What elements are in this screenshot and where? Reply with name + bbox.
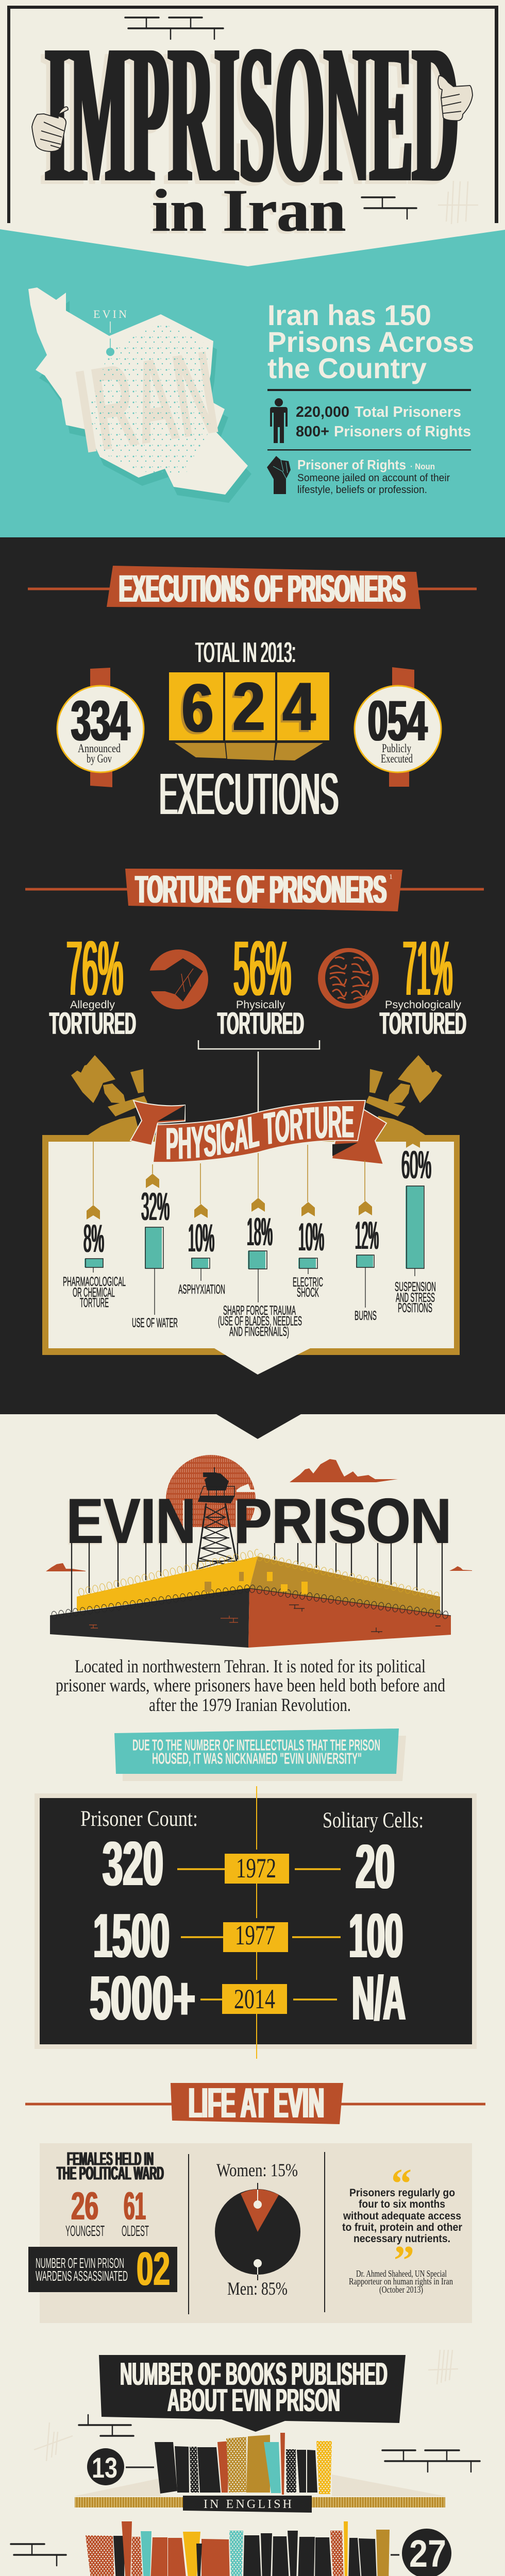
quote: Rapporteur on human rights in Iran xyxy=(349,2276,453,2286)
illustration: evin prison xyxy=(46,1455,472,1648)
small white cloud on sun xyxy=(237,1484,258,1492)
bar: asphyxiation 10% xyxy=(178,1216,225,1297)
arrow markers and hanging lines xyxy=(87,1133,420,1219)
bar: pharmacological torture 8%: TORTURE xyxy=(80,1296,109,1310)
count: 13: 13 xyxy=(92,2451,117,2484)
bar: suspension 60% xyxy=(395,1143,436,1315)
definition: Prisoner of Rights xyxy=(297,457,406,472)
label: in english xyxy=(183,2496,312,2513)
heading: books: ABOUT EVIN PRISON xyxy=(167,2383,340,2418)
panel: life at evin stats: OLDEST xyxy=(122,2223,149,2240)
text: women percentage: Women: 15% xyxy=(216,2160,298,2180)
stat: allegedly tortured: Allegedly xyxy=(70,999,115,1011)
definition: lifestyle, beliefs or profession. xyxy=(297,484,427,496)
text: 32% xyxy=(141,1185,170,1229)
column heading: solitary cells: Solitary Cells: xyxy=(323,1808,424,1833)
row 1972: 1972 xyxy=(236,1853,276,1884)
cloud: small left xyxy=(46,1563,86,1571)
oldest age: 61 xyxy=(124,2184,146,2228)
counter: 624 xyxy=(169,669,329,760)
ribbon: physical torture: PHYSICAL TORTURE xyxy=(166,1106,354,1159)
bracket connector xyxy=(198,1040,319,1113)
watch tower xyxy=(197,1467,237,1569)
text: ELECTRIC xyxy=(293,1275,323,1290)
column heading: prisoner count: Prisoner Count: xyxy=(80,1807,198,1831)
definition: · Noun xyxy=(410,462,435,471)
callout: evin university xyxy=(114,1728,406,1781)
panel: life at evin stats xyxy=(28,2143,472,2323)
map watermark text: IRAN xyxy=(68,326,226,478)
row 1977: 1977 xyxy=(235,1920,275,1951)
badge: publicly executed: Executed xyxy=(381,752,413,765)
text: USE OF WATER xyxy=(132,1316,178,1330)
icon: tally mark xyxy=(438,181,478,224)
youngest age xyxy=(65,2184,105,2240)
icon: brick marks top xyxy=(125,18,223,39)
badge: publicly executed: Publicly xyxy=(382,742,411,755)
badge: announced by government xyxy=(57,668,144,787)
text: 10% xyxy=(188,1216,214,1260)
quote: (October 2013) xyxy=(379,2284,423,2295)
text: (USE OF BLADES, NEEDLES xyxy=(218,1314,302,1328)
text: men percentage: Men: 85% xyxy=(227,2278,288,2299)
panel: physical torture xyxy=(42,1135,460,1375)
count: 13 xyxy=(87,2448,154,2485)
icon: left hand xyxy=(32,107,68,151)
pie chart xyxy=(215,2183,300,2280)
badge: announced by government: by Gov xyxy=(87,752,112,765)
quote: Prisoners regularly go xyxy=(349,2187,455,2199)
bar: use of water 32% xyxy=(132,1185,178,1330)
badge: announced by government: 334 xyxy=(71,689,130,753)
bar: sharp force trauma 18% xyxy=(218,1210,302,1339)
stat: psychologically tortured xyxy=(380,925,466,1041)
cloud: large xyxy=(290,1459,398,1482)
label: in english: IN ENGLISH xyxy=(204,2498,292,2511)
wardens box: NUMBER OF EVIN PRISON xyxy=(36,2255,124,2271)
stat: allegedly tortured: TORTURED xyxy=(49,1006,136,1041)
prisoner stats: Total Prisoners xyxy=(355,404,461,420)
quote xyxy=(342,2161,462,2295)
icon: crossed arrow right xyxy=(366,1055,442,1136)
quote: Dr. Ahmed Shaheed, UN Special xyxy=(356,2268,447,2279)
counter: 624: 4 xyxy=(283,669,315,745)
row 2014: 5000+ xyxy=(90,1963,195,2033)
heading: prison count: Iran has 150 xyxy=(267,299,431,331)
panel: timeline: N/A xyxy=(352,1963,406,2033)
bar: electric shock 10% xyxy=(293,1215,324,1300)
counter: 624: 2 xyxy=(233,669,265,745)
prisoner stats: 220,000 xyxy=(296,404,349,420)
icon: crossed arrow left xyxy=(71,1055,147,1136)
text: AND STRESS xyxy=(396,1291,435,1305)
icon: brick marks and tallies xyxy=(11,2350,480,2566)
sun xyxy=(166,1455,256,1527)
prisoner stats xyxy=(296,404,471,440)
shelf shade xyxy=(74,2475,445,2496)
badge: publicly executed xyxy=(355,667,441,787)
quote: “ xyxy=(391,2161,412,2207)
definition: Someone jailed on account of their xyxy=(297,472,450,484)
dark notch xyxy=(216,1414,301,1439)
heading: prison count xyxy=(267,299,474,384)
row 2014 xyxy=(90,1963,406,2033)
females heading xyxy=(57,2148,164,2183)
quote: ” xyxy=(394,2238,414,2283)
ribbon: physical torture xyxy=(130,1099,388,1164)
heading banner: life at evin: LIFE AT EVIN xyxy=(189,2079,324,2127)
row 1972 xyxy=(103,1828,395,1902)
sign poles xyxy=(72,1543,442,1615)
bar: pharmacological torture 8%: 8% xyxy=(83,1217,104,1261)
prisoner stats: 800+ xyxy=(296,423,329,440)
definition xyxy=(297,457,450,496)
icon: fist in circle xyxy=(147,950,208,1009)
badge: announced by government: Announced xyxy=(78,742,121,755)
razor wire xyxy=(50,1548,451,1620)
quote: without adequate access xyxy=(343,2210,461,2222)
text: 10% xyxy=(298,1215,324,1259)
bar: electric shock 10%: SHOCK xyxy=(297,1285,319,1300)
row 1972: 20 xyxy=(356,1832,395,1902)
bar: burns 12% xyxy=(355,1214,379,1323)
bar: pharmacological torture 8%: OR CHEMICAL xyxy=(73,1285,115,1300)
heading: books xyxy=(99,2355,406,2432)
icon: brick mark xyxy=(362,197,416,219)
stat: physically tortured xyxy=(217,925,304,1041)
quote: necessary nutrients. xyxy=(354,2233,450,2245)
map of Iran xyxy=(28,287,251,503)
females heading: THE POLITICAL WARD xyxy=(57,2163,164,2183)
building walls xyxy=(77,1556,258,1611)
heading: prison count: the Country xyxy=(267,352,427,384)
text: 12% xyxy=(355,1214,379,1258)
bookshelf: persian xyxy=(71,2521,451,2576)
stat: physically tortured: Physically xyxy=(236,999,285,1011)
text block: evin description: Located in northwestern Tehran. It is noted for its political xyxy=(75,1656,426,1676)
bar: pharmacological torture 8% xyxy=(63,1217,126,1310)
panel: header frame xyxy=(7,6,498,223)
count: 27: 27 xyxy=(409,2532,446,2575)
counter: 624: 6 xyxy=(182,670,213,747)
icon: person xyxy=(270,398,288,443)
text: TOTAL IN 2013: xyxy=(195,636,296,668)
stat: physically tortured: TORTURED xyxy=(217,1006,304,1041)
row 1977: 100 xyxy=(349,1901,403,1971)
timeline axis xyxy=(256,1786,257,2059)
bar: sharp force trauma 18%: 18% xyxy=(247,1210,273,1254)
youngest age: 26 xyxy=(71,2184,98,2228)
icon: right hand xyxy=(438,76,473,121)
text: 56% xyxy=(233,925,291,1011)
text: SUSPENSION xyxy=(395,1280,436,1294)
heading banner: life at evin xyxy=(25,2079,485,2127)
row 2014: 2014 xyxy=(234,1984,275,2014)
bookshelf: english xyxy=(74,2433,445,2513)
wardens box xyxy=(28,2243,177,2295)
text: PHARMACOLOGICAL xyxy=(63,1275,126,1289)
heading: prison count: Prisons Across xyxy=(267,326,474,358)
panel: teal intro xyxy=(0,229,505,537)
row 1977: 1500 xyxy=(93,1901,170,1971)
panel: life at evin stats: YOUNGEST xyxy=(65,2223,105,2240)
wall bricks xyxy=(89,1616,238,1628)
row 1972: 320 xyxy=(103,1828,163,1899)
stat: allegedly tortured xyxy=(49,925,136,1041)
females heading: FEMALES HELD IN xyxy=(67,2148,154,2169)
heading: evin: EVIN xyxy=(66,1486,196,1557)
text: 60% xyxy=(401,1143,431,1187)
text block: evin description: after the 1979 Iranian Revolution. xyxy=(149,1694,351,1715)
row 1977 xyxy=(93,1901,403,1971)
subtitle: in Iran xyxy=(152,177,346,244)
quote: four to six months xyxy=(359,2198,445,2210)
bar: sharp force trauma 18%: AND FINGERNAILS) xyxy=(229,1325,289,1339)
windows xyxy=(205,1572,308,1594)
count: 27 xyxy=(391,2529,451,2576)
bar: sharp force trauma 18%: SHARP FORCE TRAUMA xyxy=(223,1303,296,1318)
wardens box: 02 xyxy=(137,2243,170,2295)
heading banner: torture: 1 xyxy=(389,873,393,881)
map pin xyxy=(106,321,114,356)
panel: timeline xyxy=(35,1786,477,2059)
cloud: small right xyxy=(449,1566,472,1571)
stat: psychologically tortured: Psychologically xyxy=(385,999,462,1011)
wardens box: WARDENS ASSASSINATED xyxy=(36,2268,128,2284)
text block: evin description xyxy=(56,1656,445,1715)
text: 76% xyxy=(66,925,123,1011)
prisoner stats: Prisoners of Rights xyxy=(334,423,471,440)
bar: suspension 60%: POSITIONS xyxy=(398,1301,432,1315)
panel: dark executions and torture xyxy=(0,537,505,1414)
icon: brain in circle xyxy=(318,948,379,1009)
heading: prison: PRISON xyxy=(234,1486,451,1557)
map label: EVIN xyxy=(93,308,127,320)
text: ASPHYXIATION xyxy=(178,1282,225,1297)
bar: burns 12%: BURNS xyxy=(355,1309,377,1323)
oldest age xyxy=(122,2184,149,2240)
shelf shade xyxy=(71,2575,442,2576)
icon: raised fist xyxy=(267,456,291,494)
badge: publicly executed: 054 xyxy=(368,689,427,753)
quote: to fruit, protein and other xyxy=(342,2222,462,2233)
